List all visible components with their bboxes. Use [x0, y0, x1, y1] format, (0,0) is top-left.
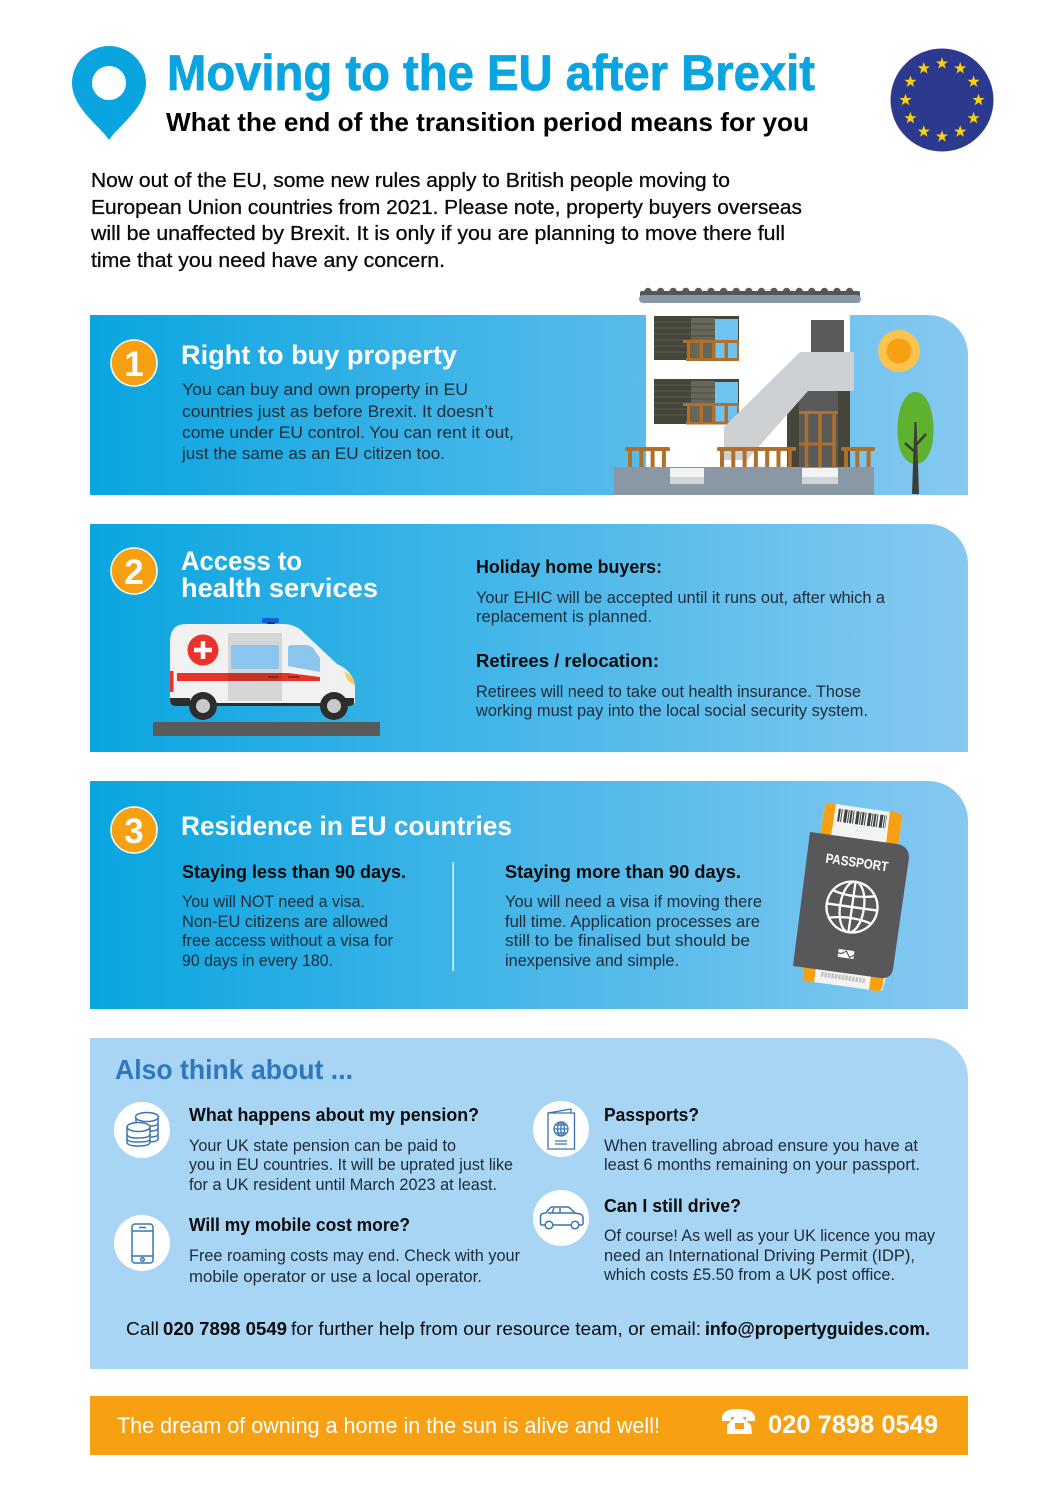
number badge 1: 1 [124, 345, 144, 384]
text block: staying more than 90 days: full time. Application processes are [505, 913, 760, 931]
title: Moving to the EU after Brexit [167, 45, 815, 101]
body text: You can buy and own property in EU [182, 381, 468, 399]
number badge 3 [111, 807, 157, 853]
panel: access to health services [90, 524, 968, 752]
text block: retirees / relocation: working must pay into the local social security system. [475, 702, 868, 720]
icon: EU flag [890, 48, 994, 152]
icon: telephone [722, 1409, 755, 1434]
illustration: house [614, 291, 875, 495]
text block: staying more than 90 days: inexpensive and simple. [505, 952, 679, 970]
text block: pension: you in EU countries. It will be uprated just like [189, 1156, 513, 1174]
text block: mobile: mobile operator or use a local operator. [189, 1268, 482, 1286]
heading: Residence in EU countries [181, 811, 512, 841]
text block: driving: Of course! As well as your UK licence you may [604, 1227, 936, 1245]
phone number: 020 7898 0549 [768, 1411, 938, 1439]
text block: mobile [189, 1215, 520, 1286]
body text: countries just as before Brexit. It doesn’t [182, 403, 493, 421]
icon: mobile phone [114, 1215, 170, 1271]
heading: Also think about ... [115, 1054, 353, 1085]
text block: staying less than 90 days: free access without a visa for [182, 932, 393, 950]
text block: mobile: Will my mobile cost more? [189, 1215, 410, 1235]
contact line: Call [126, 1319, 159, 1339]
icon: tree [898, 392, 934, 494]
icon: coins [114, 1102, 170, 1158]
number badge 1 [111, 340, 157, 386]
text block: staying less than 90 days: Staying less than 90 days. [182, 862, 406, 882]
text block: driving: Can I still drive? [604, 1196, 741, 1216]
slogan: The dream of owning a home in the sun is alive and well! [117, 1413, 660, 1438]
body text: just the same as an EU citizen too. [181, 445, 445, 463]
contact line [126, 1319, 930, 1339]
text block: driving: which costs £5.50 from a UK post office. [603, 1266, 895, 1284]
text block: retirees / relocation [475, 651, 868, 720]
text block: pension: for a UK resident until March 2023 at least. [189, 1176, 497, 1194]
text block: retirees / relocation: Retirees will need to take out health insurance. Those [476, 683, 861, 701]
illustration: passport and tickets: PASSPORT [825, 851, 890, 874]
number badge 2: 2 [124, 553, 144, 592]
text block: staying more than 90 days: Staying more than 90 days. [505, 862, 741, 882]
text block: staying more than 90 days: You will need a visa if moving there [505, 893, 762, 911]
text block: pension: Your UK state pension can be paid to [189, 1137, 456, 1155]
contact line: info@propertyguides.com. [705, 1319, 930, 1339]
icon: car [533, 1190, 589, 1246]
intro text: will be unaffected by Brexit. It is only if you are planning to move there full [90, 222, 785, 245]
panel: right to buy property [90, 291, 968, 495]
text block: pension: What happens about my pension? [189, 1105, 479, 1125]
text block: passports: least 6 months remaining on your passport. [604, 1156, 920, 1174]
icon: passport [533, 1101, 589, 1157]
contact line: for further help from our resource team, or email: [291, 1319, 701, 1339]
intro text [90, 169, 802, 272]
contact line: 020 7898 0549 [163, 1319, 287, 1339]
text block: staying less than 90 days: 90 days in every 180. [182, 952, 333, 970]
footer banner [90, 1396, 968, 1455]
number badge 2 [111, 548, 157, 594]
illustration: ambulance [153, 618, 380, 736]
intro text: time that you need have any concern. [91, 249, 445, 272]
icon: sun [878, 330, 920, 372]
heading [181, 546, 378, 603]
text block: staying less than 90 days: You will NOT need a visa. [182, 893, 365, 911]
text block: holiday home buyers [476, 557, 886, 626]
text block: pension [189, 1105, 513, 1194]
panel: also think about [90, 1038, 968, 1369]
illustration: passport and tickets [793, 803, 909, 991]
text block: holiday home buyers: Your EHIC will be accepted until it runs out, after which a [476, 589, 886, 607]
text block: holiday home buyers: Holiday home buyers: [476, 557, 662, 577]
heading: Right to buy property [181, 340, 457, 370]
heading: Access to [181, 546, 302, 576]
panel: residence in EU countries [90, 781, 968, 1009]
number badge 3: 3 [124, 812, 144, 851]
text block: staying more than 90 days: still to be finalised but should be [505, 932, 750, 950]
body text: come under EU control. You can rent it out, [182, 424, 514, 442]
text block: staying more than 90 days [505, 862, 762, 970]
text block: mobile: Free roaming costs may end. Check with your [189, 1247, 520, 1265]
text block: driving [603, 1196, 936, 1284]
text block: passports: Passports? [604, 1105, 699, 1125]
icon: location pin [72, 46, 146, 140]
text block: driving: need an International Driving Permit (IDP), [604, 1247, 915, 1265]
intro text: Now out of the EU, some new rules apply to British people moving to [91, 169, 730, 192]
intro text: European Union countries from 2021. Please note, property buyers overseas [91, 196, 802, 219]
text block: passports: When travelling abroad ensure you have at [604, 1137, 918, 1155]
body text [181, 381, 514, 463]
subtitle: What the end of the transition period means for you [166, 107, 809, 137]
text block: passports [604, 1105, 920, 1174]
text block: staying less than 90 days: Non-EU citizens are allowed [182, 913, 388, 931]
heading: health services [181, 573, 378, 603]
text block: retirees / relocation: Retirees / relocation: [476, 651, 659, 671]
text block: staying less than 90 days [182, 862, 406, 970]
text block: holiday home buyers: replacement is planned. [476, 608, 652, 626]
